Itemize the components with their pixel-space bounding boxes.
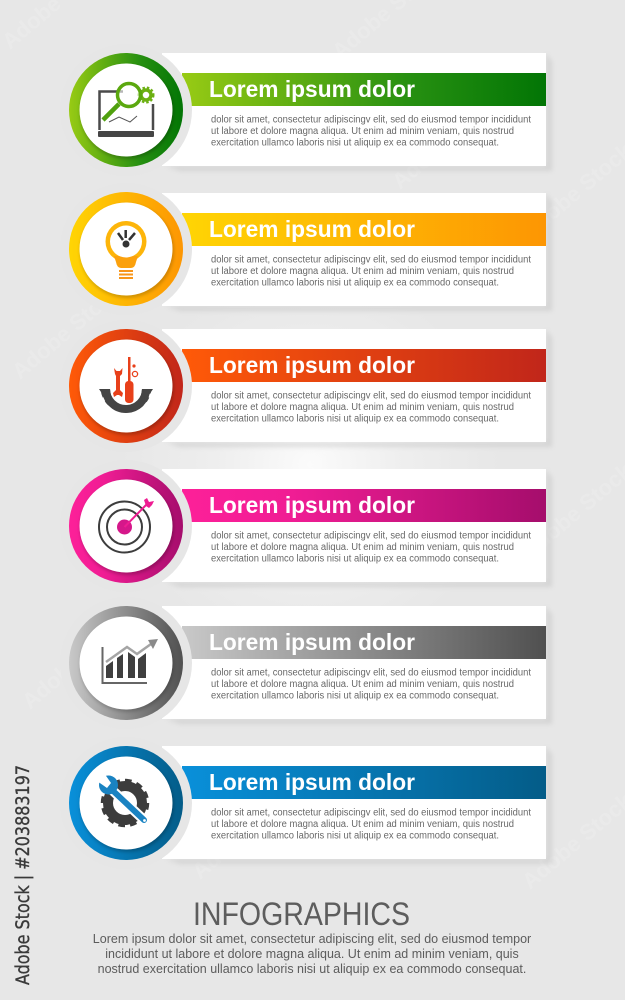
text block 6	[211, 808, 531, 842]
badge 6	[60, 737, 192, 869]
card 4	[162, 469, 546, 582]
panel 2: idea	[60, 183, 552, 315]
text block 3	[211, 390, 531, 424]
heading band 4: Lorem ipsum dolor	[209, 492, 415, 518]
text block 3: exercitation ullamco laboris nisi ut aliquip ex ea commodo consequat.	[211, 414, 499, 424]
text block 4: dolor sit amet, consectetur adipiscingv elit, sed do eiusmod tempor incididunt	[211, 530, 531, 542]
stock watermarks: Adobe Stock	[387, 88, 507, 194]
heading band 2: Lorem ipsum dolor	[209, 216, 415, 242]
footer text block: incididunt ut labore et dolore magna aliqua. Ut enim ad minim veniam, quis	[105, 947, 519, 961]
text block 2: dolor sit amet, consectetur adipiscingv elit, sed do eiusmod tempor incididunt	[211, 254, 531, 266]
text block 1	[211, 114, 531, 148]
panel 1: analysis	[60, 44, 552, 176]
heading band 2	[182, 213, 546, 246]
text block 4	[211, 530, 531, 564]
text block 5: ut labore et dolore magna aliqua. Ut enim ad minim veniam, quis nostrud	[211, 679, 514, 690]
title: INFOGRAPHICS	[193, 896, 410, 932]
text block 4: exercitation ullamco laboris nisi ut aliquip ex ea commodo consequat.	[211, 554, 499, 564]
heading band 1	[182, 73, 546, 106]
badge 2	[60, 183, 192, 315]
heading band 3: Lorem ipsum dolor	[209, 352, 415, 378]
badge 4	[60, 460, 192, 592]
heading band 5	[182, 626, 546, 659]
card 2 shadow	[165, 193, 552, 311]
card 5 shadow	[165, 606, 552, 724]
panel 6: settings	[60, 737, 552, 869]
text block 6: ut labore et dolore magna aliqua. Ut enim ad minim veniam, quis nostrud	[211, 819, 514, 830]
icon: light bulb	[106, 221, 146, 279]
stock watermarks: Adobe Stock	[227, 428, 347, 534]
heading band 6	[182, 766, 546, 799]
badge 3	[60, 320, 192, 452]
text block 5: exercitation ullamco laboris nisi ut aliquip ex ea commodo consequat.	[211, 690, 499, 702]
panel 3: tools	[60, 320, 552, 452]
text block 3: ut labore et dolore magna aliqua. Ut enim ad minim veniam, quis nostrud	[211, 402, 514, 413]
icon: tools on gear	[99, 357, 153, 411]
footer text block: Lorem ipsum dolor sit amet, consectetur adipiscing elit, sed do eiusmod tempor	[93, 932, 531, 946]
card 3	[162, 329, 546, 442]
text block 4: ut labore et dolore magna aliqua. Ut enim ad minim veniam, quis nostrud	[211, 542, 514, 553]
icon: rising bar chart	[102, 639, 158, 683]
stock watermarks: Adobe Stock	[7, 278, 127, 384]
stock id label: Adobe Stock | #203883197	[13, 765, 34, 985]
text block 1: ut labore et dolore magna aliqua. Ut enim ad minim veniam, quis nostrud	[211, 126, 514, 137]
text block 6: dolor sit amet, consectetur adipiscingv elit, sed do eiusmod tempor incididunt	[211, 808, 531, 818]
badge 5	[60, 597, 192, 729]
icon: laptop with magnifier and gear	[98, 84, 154, 137]
card 1 shadow	[165, 53, 552, 171]
icon: wrench over gear	[97, 773, 147, 825]
badge 1	[60, 44, 192, 176]
panel 5: growth	[60, 597, 552, 729]
card 5	[162, 606, 546, 719]
panel 4: target	[60, 460, 552, 592]
card 2	[162, 193, 546, 306]
text block 1: exercitation ullamco laboris nisi ut aliquip ex ea commodo consequat.	[211, 138, 499, 148]
stock watermarks: Adobe Stock	[347, 618, 467, 724]
text block 5	[211, 668, 531, 702]
stock watermarks: Adobe Stock	[17, 608, 137, 714]
text block 2	[211, 254, 531, 288]
card 6	[162, 746, 546, 859]
card 4 shadow	[165, 469, 552, 587]
stock watermarks: Adobe Stock	[187, 778, 307, 884]
card 1	[162, 53, 546, 166]
icon: target with arrow	[99, 498, 154, 552]
text block 1: dolor sit amet, consectetur adipiscingv elit, sed do eiusmod tempor incididunt	[211, 114, 531, 126]
card 6 shadow	[165, 746, 552, 864]
text block 6: exercitation ullamco laboris nisi ut aliquip ex ea commodo consequat.	[211, 830, 499, 842]
footer text block: nostrud exercitation ullamco laboris nisi ut aliquip ex ea commodo consequat.	[98, 962, 526, 976]
text block 5: dolor sit amet, consectetur adipiscingv elit, sed do eiusmod tempor incididunt	[211, 668, 531, 678]
card 3 shadow	[165, 329, 552, 447]
heading band 5: Lorem ipsum dolor	[209, 629, 415, 655]
text block 2: exercitation ullamco laboris nisi ut aliquip ex ea commodo consequat.	[211, 278, 499, 288]
text block 2: ut labore et dolore magna aliqua. Ut enim ad minim veniam, quis nostrud	[211, 266, 514, 277]
heading band 3	[182, 349, 546, 382]
heading band 1: Lorem ipsum dolor	[209, 76, 415, 102]
text block 3: dolor sit amet, consectetur adipiscingv elit, sed do eiusmod tempor incididunt	[211, 390, 531, 402]
heading band 4	[182, 489, 546, 522]
heading band 6: Lorem ipsum dolor	[209, 769, 415, 795]
